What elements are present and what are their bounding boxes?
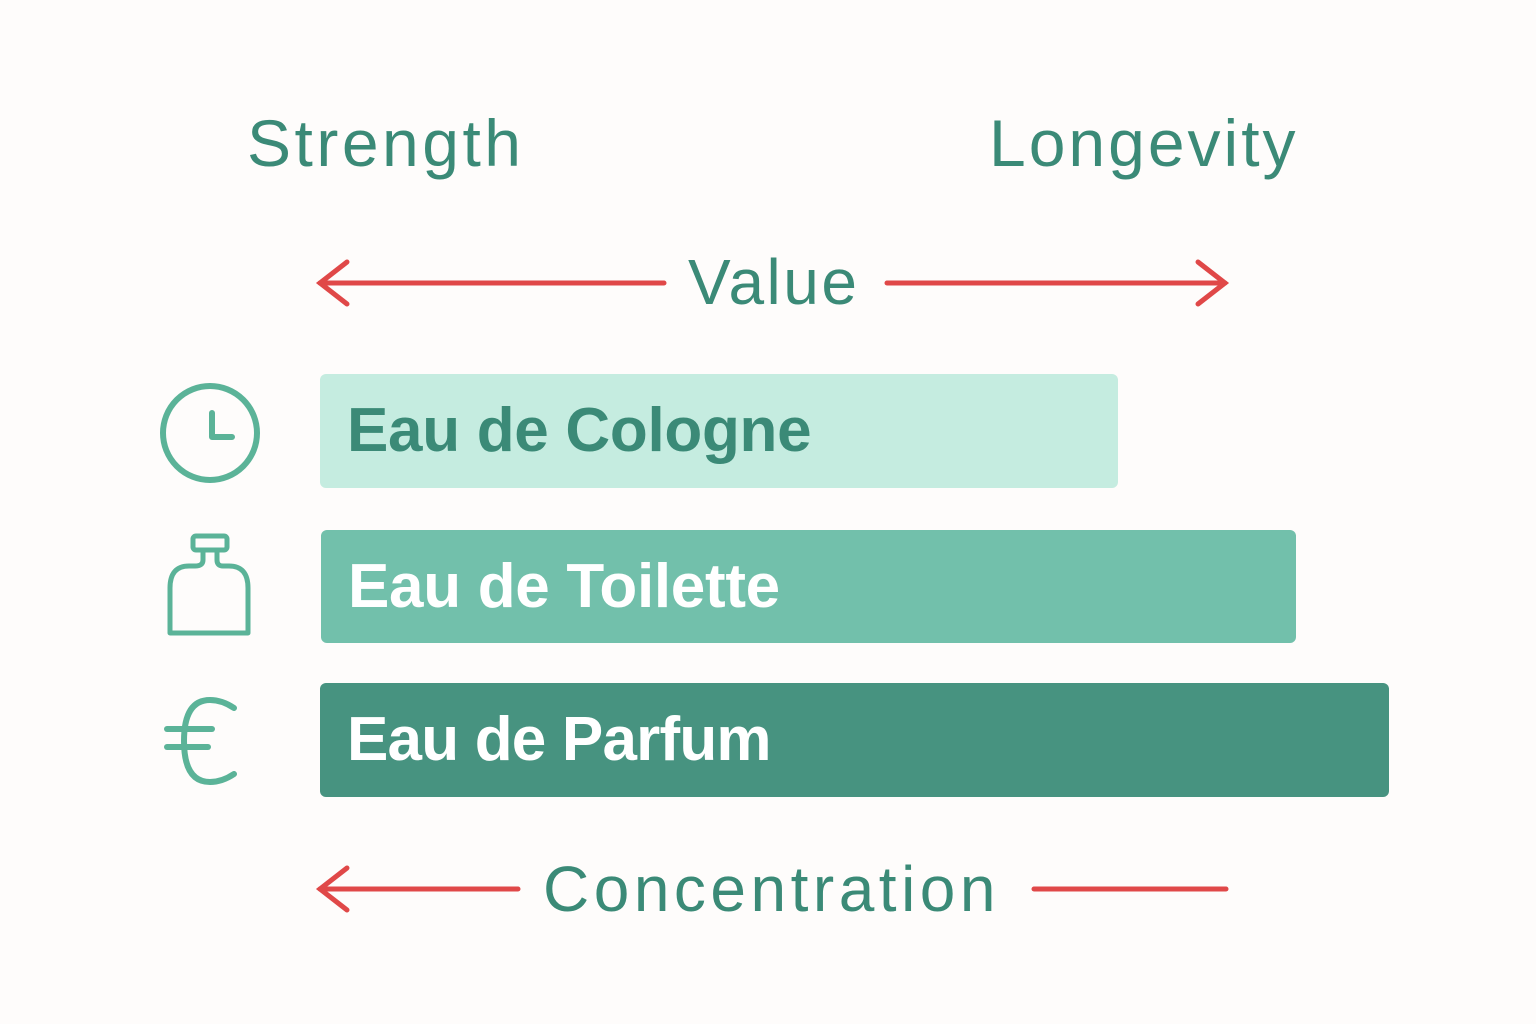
bar: Eau de Cologne: Eau de Cologne xyxy=(347,396,811,465)
icon: bottle xyxy=(168,534,250,636)
label: Concentration: Concentration xyxy=(543,853,1000,925)
icon: clock xyxy=(160,383,260,483)
bar: Eau de Toilette: Eau de Toilette xyxy=(348,552,780,620)
bar: Eau de Cologne xyxy=(320,374,1118,488)
label: Value: Value xyxy=(688,246,859,318)
bar: Eau de Parfum: Eau de Parfum xyxy=(347,705,771,774)
heading: Longevity: Longevity xyxy=(989,106,1299,180)
bar: Eau de Toilette xyxy=(321,530,1296,643)
bar: Eau de Parfum xyxy=(320,683,1389,797)
icon: euro xyxy=(164,697,237,785)
heading: Strength: Strength xyxy=(247,106,524,180)
